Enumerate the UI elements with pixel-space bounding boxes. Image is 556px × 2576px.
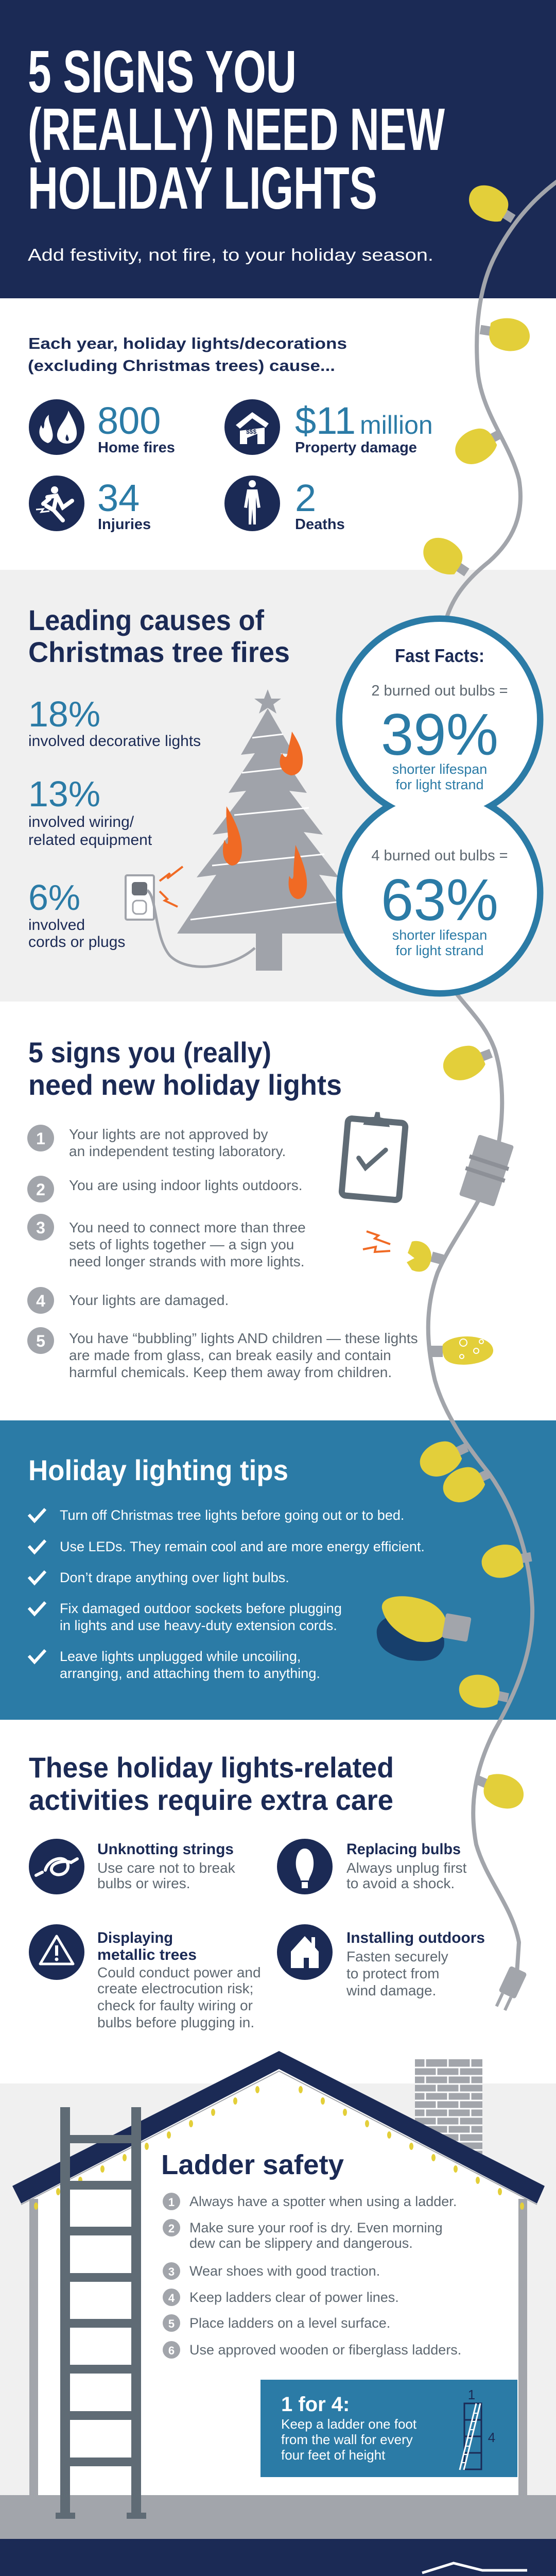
care item: metallic trees: bulbs before plugging in.: [97, 2014, 254, 2030]
cause: cords: [28, 877, 125, 951]
care item: metallic trees: create electrocution risk;: [97, 1980, 253, 1996]
care item: unknotting: Use care not to break: [97, 1860, 236, 1876]
bubble bulb: [430, 1336, 493, 1365]
title: [28, 38, 445, 222]
icon: warning: [29, 1924, 84, 1980]
stat: home fires: Home fires: [98, 439, 175, 456]
signs list: 4: [36, 1292, 45, 1310]
tips list: in lights and use heavy-duty extension cords.: [60, 1618, 337, 1633]
care item: replacing bulbs: Always unplug first: [346, 1860, 467, 1876]
broken bulb with sparks: [363, 1231, 444, 1272]
care item: installing outdoors: to protect from: [346, 1965, 440, 1981]
fast fact 1: shorter lifespan: [392, 761, 487, 777]
stat: property damage: $11: [295, 399, 356, 442]
illustration: big bulb: [377, 1596, 472, 1661]
icon: knot: [29, 1839, 84, 1894]
fast fact 2: [371, 848, 508, 958]
signs list: need longer strands with more lights.: [69, 1253, 305, 1269]
care item: replacing bulbs: Replacing bulbs: [346, 1841, 461, 1858]
fast fact 2: 4 burned out bulbs =: [371, 848, 508, 864]
ladder safety list: 5: [168, 2317, 175, 2330]
ground: [0, 2495, 556, 2539]
care item: installing outdoors: [277, 1924, 485, 1998]
cause: cords: 6%: [28, 877, 80, 918]
fast fact 1: 39%: [381, 702, 498, 768]
heading: ladder safety: Ladder safety: [161, 2149, 344, 2180]
care item: metallic trees: Could conduct power and: [97, 1964, 261, 1980]
callout: 1 for 4: 1 for 4:: [281, 2393, 350, 2416]
stat: home fires: 800: [97, 399, 161, 442]
ladder safety list: 1: [168, 2196, 175, 2209]
tips list: Don’t drape anything over light bulbs.: [60, 1570, 289, 1585]
title: HOLIDAY LIGHTS: [28, 155, 377, 222]
footer: [0, 2539, 556, 2576]
tips list: Fix damaged outdoor sockets before plugging: [60, 1601, 342, 1616]
care item: metallic trees: check for faulty wiring or: [97, 1997, 253, 2013]
illustration: ladder: [56, 2107, 146, 2519]
icon: falling person: [29, 476, 84, 531]
ladder safety list: 3: [168, 2265, 175, 2278]
tips list: [29, 1507, 425, 1681]
fast fact 1: Fast Facts:: [395, 645, 484, 666]
callout: 1 for 4: [260, 2380, 517, 2477]
ladder safety list: Make sure your roof is dry. Even morning: [189, 2220, 443, 2235]
heading: leading causes: Leading causes of: [28, 604, 264, 636]
logo: connect: [422, 2563, 527, 2576]
fast facts circles: [339, 619, 540, 993]
stat: injuries: [29, 476, 151, 533]
icon: house: [277, 1924, 333, 1980]
signs list: You need to connect more than three: [69, 1219, 306, 1235]
care item: replacing bulbs: to avoid a shock.: [346, 1875, 455, 1891]
cause: wiring: [28, 774, 152, 849]
fast fact 1: [371, 645, 508, 792]
signs list: 1: [36, 1129, 45, 1148]
stat: property damage: million: [360, 411, 433, 439]
fast fact 2: shorter lifespan: [392, 927, 487, 943]
care item: metallic trees: [29, 1924, 261, 2030]
stat: property damage: [224, 399, 433, 456]
section background: house: [0, 2083, 556, 2495]
bulbs along string: [416, 178, 534, 1815]
stat: injuries: Injuries: [98, 516, 151, 533]
icon: ladder ratio diagram: 4: [488, 2430, 495, 2445]
stat: deaths: Deaths: [295, 516, 345, 533]
stat: injuries: 34: [97, 477, 140, 519]
header background: [0, 0, 556, 298]
heading: extra care: [29, 1751, 394, 1816]
tips list: Leave lights unplugged while uncoiling,: [60, 1649, 301, 1664]
fast fact 1: 2 burned out bulbs =: [371, 683, 508, 699]
light string cord: [428, 180, 556, 1973]
icon: standing person: [224, 476, 280, 531]
stat: property damage: Property damage: [295, 439, 417, 456]
icon: bulb: [277, 1839, 333, 1894]
stat: home fires: [29, 399, 175, 456]
stats intro text: Each year, holiday lights/decorations: [28, 334, 347, 352]
callout: 1 for 4: from the wall for every: [281, 2432, 413, 2447]
cause: decorative lights: [28, 694, 201, 750]
icon: ladder ratio diagram: 1: [468, 2387, 475, 2402]
tips list: arranging, and attaching them to anything.: [60, 1666, 320, 1681]
fast fact 2: 63%: [381, 868, 498, 933]
icon: fire: [29, 399, 84, 455]
illustration: house: [12, 2051, 545, 2495]
care item: replacing bulbs: [277, 1839, 467, 1894]
heading: extra care: activities require extra care: [29, 1784, 393, 1816]
title: 5 SIGNS YOU: [28, 38, 297, 105]
icon: house with money: $$$: [246, 428, 256, 435]
signs list: 3: [36, 1218, 45, 1237]
ladder safety list: 6: [168, 2344, 175, 2357]
heading: extra care: These holiday lights-related: [29, 1751, 394, 1784]
signs list: harmful chemicals. Keep them away from children.: [69, 1364, 392, 1380]
ladder safety list: dew can be slippery and dangerous.: [189, 2235, 413, 2251]
care item: installing outdoors: wind damage.: [346, 1982, 436, 1998]
stats intro text: (excluding Christmas trees) cause...: [28, 357, 335, 375]
ladder safety list: 4: [168, 2292, 175, 2304]
cause: cords: involved: [28, 917, 85, 934]
care item: unknotting: [29, 1839, 236, 1894]
illustration: outlet and cord: [126, 867, 255, 967]
cause: wiring: involved wiring/: [28, 814, 134, 831]
ladder safety list: Place ladders on a level surface.: [189, 2315, 390, 2331]
icon: clipboard: [341, 1110, 406, 1200]
heading: 5 signs: need new holiday lights: [28, 1069, 342, 1101]
section background: stats: [0, 298, 556, 570]
care item: unknotting: bulbs or wires.: [97, 1875, 190, 1891]
cause: decorative lights: 18%: [28, 694, 100, 734]
bulb near tips heading: [414, 1432, 474, 1483]
plug at cord end: [492, 1965, 527, 2012]
signs list: 5: [36, 1332, 45, 1350]
section background: tree fires: [0, 570, 556, 1002]
cause: cords: cords or plugs: [28, 934, 125, 951]
signs list: are made from glass, can break easily and contain: [69, 1347, 391, 1363]
ladder safety list: Use approved wooden or fiberglass ladders.: [189, 2342, 461, 2358]
ladder safety list: [163, 2193, 461, 2359]
icon: house with money: [224, 399, 280, 455]
fast fact 2: for light strand: [395, 943, 484, 958]
heading: leading causes: [28, 604, 290, 668]
ladder safety list: Always have a spotter when using a ladder.: [189, 2194, 457, 2209]
heading: 5 signs: [28, 1036, 342, 1101]
signs list: 2: [36, 1180, 45, 1199]
ladder safety list: Keep ladders clear of power lines.: [189, 2290, 399, 2305]
illustration: burning tree: [177, 689, 358, 971]
tips list: Use LEDs. They remain cool and are more energy efficient.: [60, 1539, 425, 1554]
cause: wiring: related equipment: [28, 832, 152, 849]
subtitle: Add festivity, not fire, to your holiday season.: [28, 245, 433, 264]
string connector: [457, 1134, 516, 1207]
cause: wiring: 13%: [28, 774, 100, 814]
care item: installing outdoors: Installing outdoors: [346, 1929, 485, 1946]
signs list: Your lights are not approved by: [69, 1126, 268, 1142]
heading: tips: Holiday lighting tips: [28, 1454, 288, 1486]
care item: metallic trees: metallic trees: [97, 1946, 197, 1963]
signs list: sets of lights together — a sign you: [69, 1236, 294, 1252]
heading: leading causes: Christmas tree fires: [28, 636, 290, 668]
care item: metallic trees: Displaying: [97, 1929, 173, 1946]
ladder safety list: 2: [168, 2222, 175, 2235]
stats intro text: [28, 334, 347, 375]
callout: 1 for 4: four feet of height: [281, 2447, 386, 2463]
icon: ladder ratio diagram: [460, 2387, 495, 2470]
care item: installing outdoors: Fasten securely: [346, 1948, 448, 1964]
signs list: You are using indoor lights outdoors.: [69, 1177, 303, 1193]
callout: 1 for 4: Keep a ladder one foot: [281, 2416, 417, 2432]
heading: 5 signs: 5 signs you (really): [28, 1036, 271, 1069]
signs list: You have “bubbling” lights AND children — these lights: [69, 1330, 418, 1346]
section background: tips: [0, 1420, 556, 1720]
signs list: [27, 1125, 418, 1380]
signs list: an independent testing laboratory.: [69, 1143, 286, 1159]
ladder safety list: Wear shoes with good traction.: [189, 2263, 380, 2279]
stat: deaths: 2: [295, 477, 316, 519]
cause: decorative lights: involved decorative lights: [28, 733, 201, 750]
stat: deaths: [224, 476, 345, 533]
care item: unknotting: Unknotting strings: [97, 1841, 234, 1858]
signs list: Your lights are damaged.: [69, 1292, 229, 1308]
fast fact 1: for light strand: [395, 777, 484, 792]
tips list: Turn off Christmas tree lights before going out or to bed.: [60, 1507, 404, 1523]
